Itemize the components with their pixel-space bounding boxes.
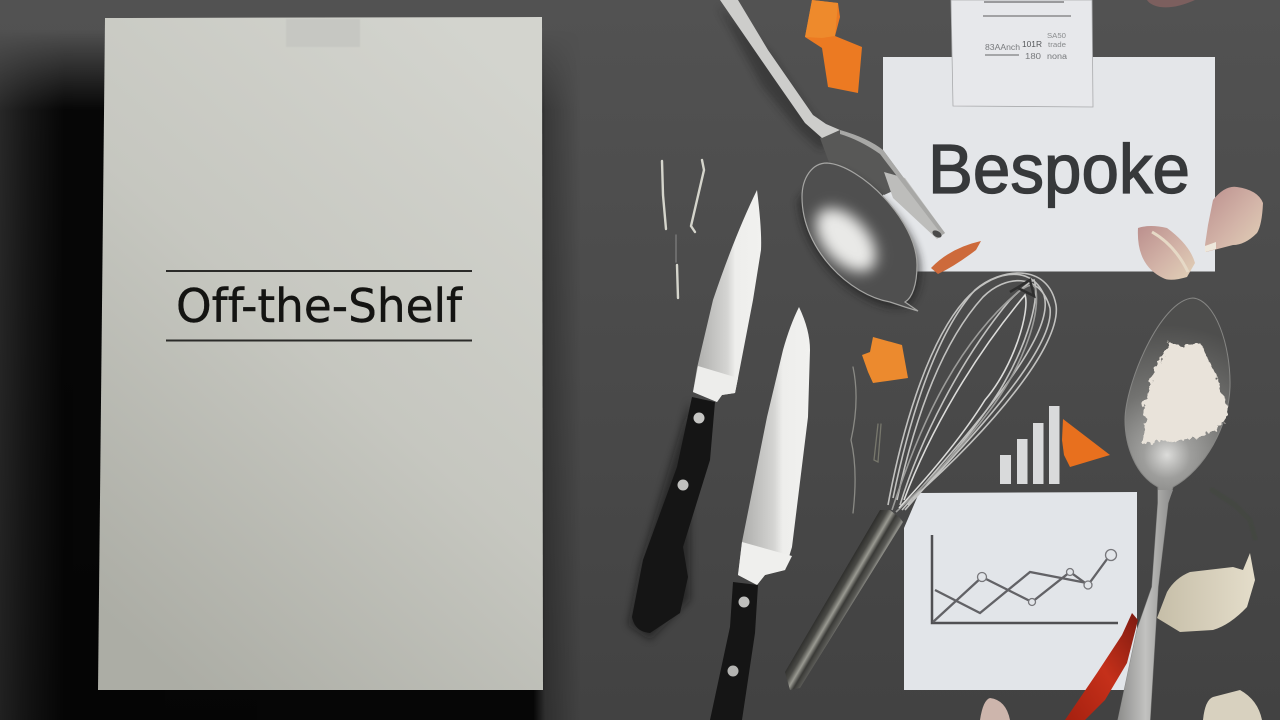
heading: off-the-shelf: Off-the-Shelf xyxy=(176,279,464,333)
top shallot fragment xyxy=(1147,0,1195,7)
icon: paring knife xyxy=(628,190,761,640)
line chart xyxy=(932,535,1118,623)
icon: balloon whisk xyxy=(785,273,1056,690)
icon: orange wedge xyxy=(1062,419,1110,467)
receipt note: 101R xyxy=(1022,40,1042,49)
icon: orange peel top xyxy=(805,0,862,93)
heading: bespoke: Bespoke xyxy=(928,130,1190,208)
icon: garlic clove xyxy=(1157,553,1255,632)
icon: upper spoon xyxy=(718,0,945,239)
receipt note: 83AAnch xyxy=(985,43,1020,52)
panel: bespoke paper xyxy=(883,57,1215,272)
threads xyxy=(662,160,881,513)
icon: orange piece middle xyxy=(862,337,908,383)
herb sprinkles xyxy=(1212,490,1255,538)
receipt note: trade xyxy=(1048,42,1066,49)
icon: shallot clove upper xyxy=(1205,187,1263,252)
chart paper with line chart xyxy=(904,492,1137,690)
flour xyxy=(1142,342,1228,444)
receipt note xyxy=(951,0,1093,107)
receipt note: nona xyxy=(1047,52,1068,61)
icon: flour spoon xyxy=(1118,298,1230,720)
receipt note: SA50 xyxy=(1047,33,1066,40)
icon: shallot clove lower xyxy=(1138,226,1195,280)
whisk handle xyxy=(785,510,903,690)
icon: garlic bottom centre xyxy=(980,698,1010,720)
icon: large serving spoon xyxy=(798,163,921,311)
bar chart xyxy=(1000,406,1060,484)
panel: off-the-shelf book xyxy=(98,17,543,690)
icon: chef knife xyxy=(710,307,810,720)
icon: orange sliver on paper xyxy=(931,241,981,274)
receipt note: 180 xyxy=(1025,52,1042,61)
icon: garlic bottom right xyxy=(1203,690,1262,720)
icon: chili xyxy=(1065,613,1138,720)
